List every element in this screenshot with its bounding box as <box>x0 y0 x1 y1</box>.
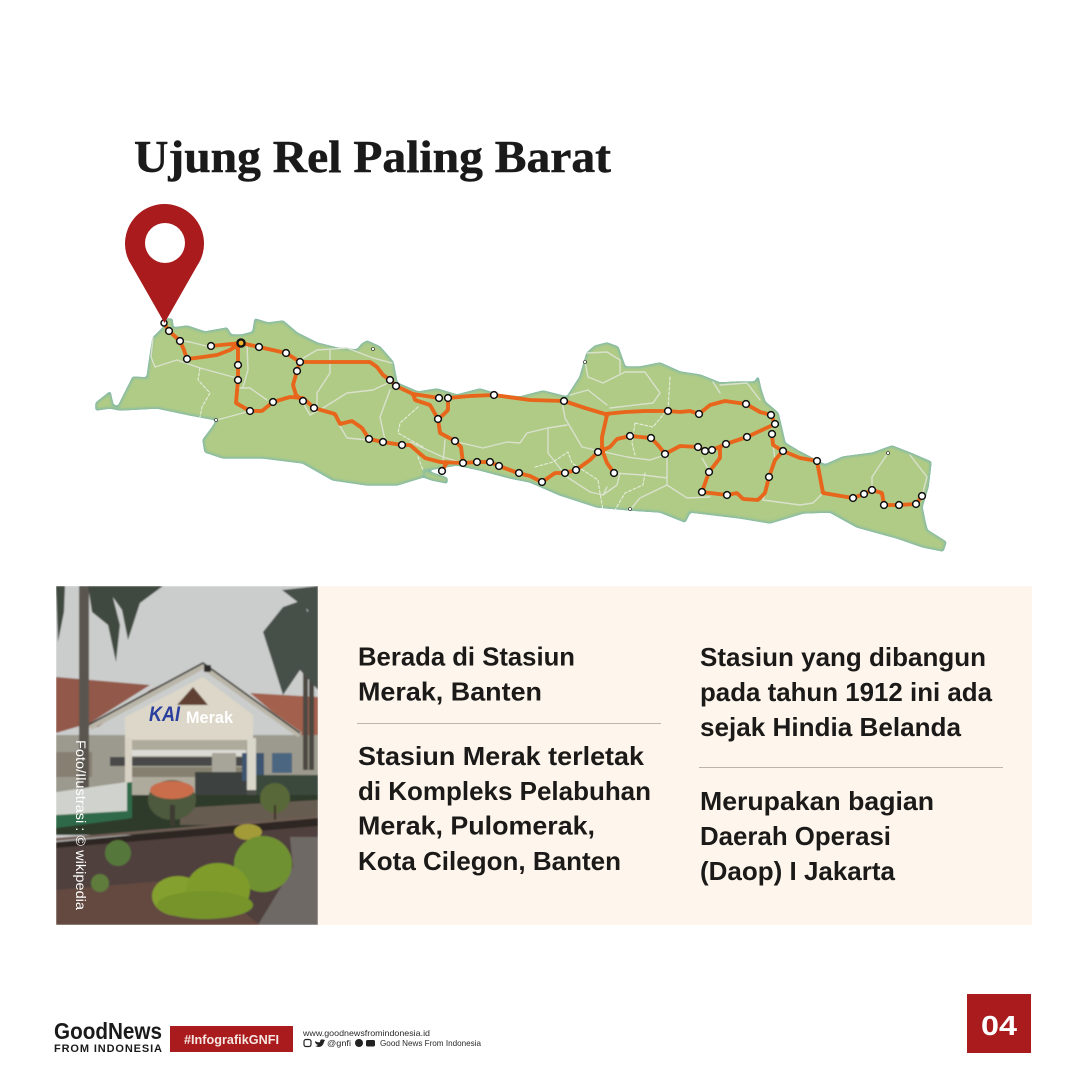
icon: youtube <box>366 1040 375 1046</box>
photo: Stasiun Merak <box>56 586 318 925</box>
sign: KAI Merak <box>149 706 233 723</box>
sign: KAI Merak: Merak <box>186 708 234 727</box>
pillars <box>125 738 132 800</box>
brick path <box>258 837 318 925</box>
rail <box>56 818 318 848</box>
icon: facebook <box>355 1039 363 1047</box>
left and right roof <box>56 677 150 733</box>
footer contact: Good News From Indonesia <box>380 1038 481 1048</box>
footer logo <box>54 1018 162 1055</box>
bushes <box>105 840 131 866</box>
text block: lokasi <box>358 642 575 706</box>
minor roads <box>151 338 927 510</box>
gable front <box>125 677 253 740</box>
hashtag badge <box>170 1026 293 1052</box>
footer logo: FROM INDONESIA <box>54 1043 162 1055</box>
text block: sejarah <box>700 642 993 742</box>
text block: kompleks pelabuhan <box>358 741 651 876</box>
sapling <box>260 783 290 813</box>
icon: location pin at Merak <box>125 204 204 323</box>
text block: sejarah: Stasiun yang dibangun <box>700 642 986 672</box>
banner <box>56 782 127 815</box>
orange railway lines <box>164 323 922 505</box>
hashtag badge: #InfografikGNFI <box>184 1033 279 1047</box>
map: Java railway network <box>96 319 946 551</box>
divider right <box>699 767 1003 768</box>
text block: daop: Daerah Operasi <box>700 821 891 851</box>
left palm <box>79 586 89 791</box>
text block: lokasi: Merak, Banten <box>358 676 542 706</box>
text block: kompleks pelabuhan: Kota Cilegon, Banten <box>358 846 621 876</box>
right palm <box>303 670 308 770</box>
footer logo: GoodNews <box>54 1018 162 1044</box>
island landmass <box>96 319 946 551</box>
text block: kompleks pelabuhan: Merak, Pulomerak, <box>358 810 595 840</box>
sign: KAI Merak: KAI <box>149 703 181 726</box>
divider left <box>357 723 661 724</box>
text block: daop: (Daop) I Jakarta <box>700 856 896 886</box>
dashed provincial boundaries <box>198 368 670 510</box>
page number: 04 <box>981 1010 1017 1041</box>
foreground earth <box>56 820 318 925</box>
flower bush <box>148 780 196 820</box>
photo credit: Foto/Ilustrasi : © wikipedia <box>73 740 89 910</box>
title: Ujung Rel Paling Barat <box>134 131 612 182</box>
text block: daop <box>700 786 934 886</box>
infographic canvas <box>54 140 1032 1053</box>
station markers <box>161 320 925 510</box>
panel: information background <box>318 586 1032 925</box>
lower wall and interior <box>56 734 318 792</box>
icon: instagram <box>304 1040 311 1046</box>
text block: sejarah: pada tahun 1912 ini ada <box>700 677 993 707</box>
text block: daop: Merupakan bagian <box>700 786 934 816</box>
icon: pin hole <box>145 223 185 263</box>
footer contact: @gnfi <box>327 1038 351 1048</box>
page number <box>967 994 1031 1053</box>
text block: kompleks pelabuhan: Stasiun Merak terletak <box>358 741 645 771</box>
footer contact <box>302 1028 481 1048</box>
text block: lokasi: Berada di Stasiun <box>358 642 575 672</box>
ground and plaza <box>56 795 318 835</box>
text block: kompleks pelabuhan: di Kompleks Pelabuhan <box>358 776 651 806</box>
footer contact: www.goodnewsfromindonesia.id <box>302 1028 430 1038</box>
text block: sejarah: sejak Hindia Belanda <box>700 712 962 742</box>
icon: twitter <box>315 1039 325 1047</box>
